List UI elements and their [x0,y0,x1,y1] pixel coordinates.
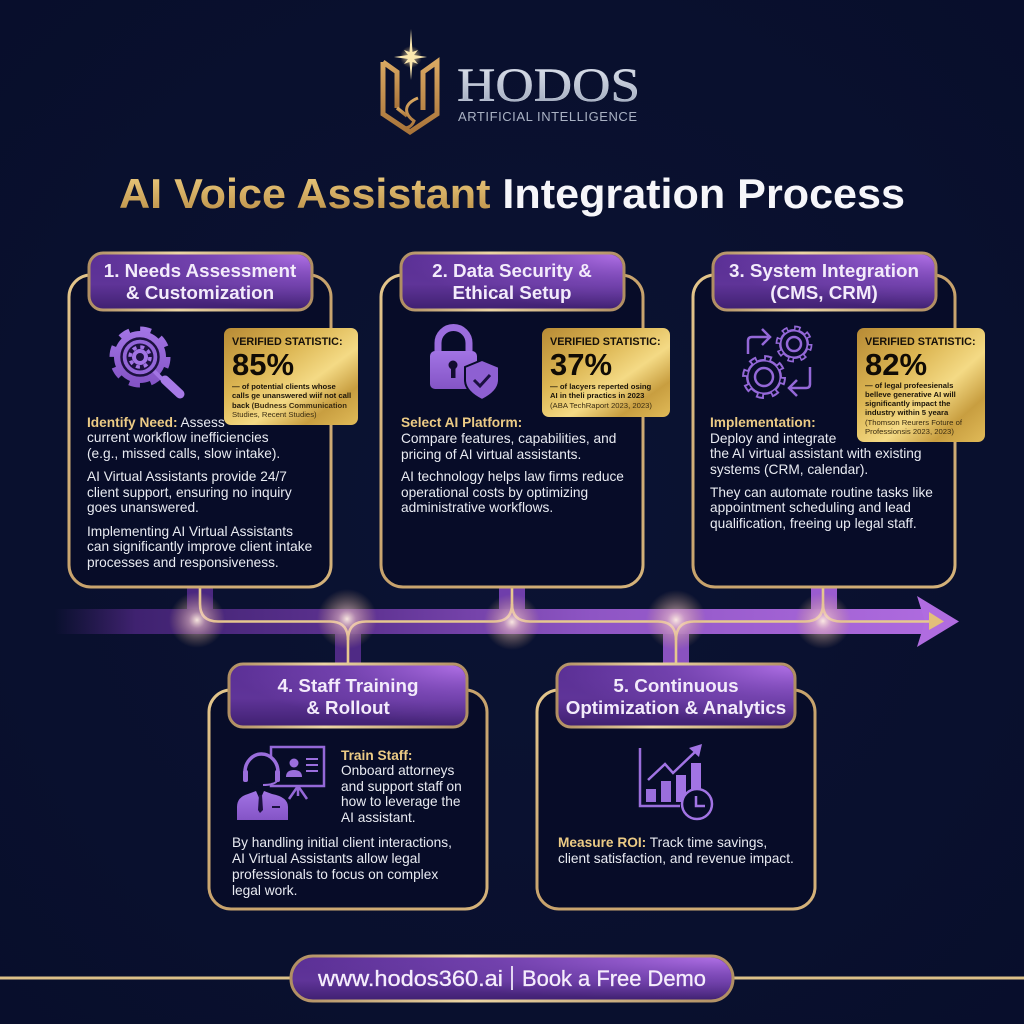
body text: (e.g., missed calls, slow intake). [87,446,280,461]
callout: verified statistic 82%: VERIFIED STATISTIC: [865,336,976,348]
body text: Train Staff: [341,748,412,763]
body text: AI Virtual Assistants provide 24/7 [87,469,287,484]
callout: verified statistic 82%: significantly impact the [865,399,951,408]
header [89,253,312,310]
body text: operational costs by optimizing [401,485,588,500]
body text: current workflow inefficiencies [87,430,269,445]
callout: verified statistic 85%: VERIFIED STATISTIC: [232,336,343,348]
logo wordmark: HODOS [457,59,640,112]
body text [558,835,794,866]
body text: AI technology helps law firms reduce [401,469,624,484]
panel: step 4 staff training [209,664,487,909]
title: AI Voice Assistant Integration Process [119,170,905,217]
body text [87,415,312,570]
callout: verified statistic 85%: calls ge unanswered wiif not call [232,391,351,400]
icon: padlock and shield [430,328,499,400]
body text: professionals to focus on complex [232,867,438,882]
icon: trainer at presentation board [237,747,324,820]
callout: verified statistic 37%: 37% [550,347,612,382]
callout: verified statistic 82%: Professionsis 2023, 2023) [865,427,954,436]
footer shine [292,958,732,1000]
callout: verified statistic 85% [224,328,358,425]
panel frame [381,275,643,587]
body text: Implementing AI Virtual Assistants [87,524,293,539]
panel: step 3 system integration [693,253,985,587]
callout: verified statistic 82%: — of legal profeesienals [865,381,953,390]
body text: Compare features, capabilities, and [401,431,616,446]
logo: Hodos Artificial Intelligence [383,29,640,132]
panel frame [69,275,331,587]
body text: By handling initial client interactions, [232,835,452,850]
body text: Measure ROI: Track time savings, [558,835,767,850]
body text: can significantly improve client intake [87,539,312,554]
panel frame [209,690,487,909]
callout: verified statistic 82%: belleve generative AI will [865,390,956,399]
header: & Customization [126,282,274,303]
flow connector lines [200,587,932,663]
body text: Identify Need: Assess [87,415,225,430]
panel: step 1 needs assessment [69,253,358,587]
callout: verified statistic 82%: industry within 5 yeara [865,408,949,417]
body text: and support staff on [341,779,462,794]
callout: verified statistic 85%: back (Budness Communication [232,401,347,410]
header: Optimization & Analytics [566,697,786,718]
body text: Implementation: [710,415,816,430]
header: 5. Continuous [613,675,739,696]
body text [401,415,624,515]
logo tagline: ARTIFICIAL INTELLIGENCE [458,109,637,124]
icon: shield H emblem [383,62,437,132]
callout: verified statistic 82% [857,328,985,442]
panel frame [537,690,815,909]
panel: step 5 continuous optimization [537,664,815,909]
icon: star [394,29,427,80]
footer call to action [0,956,1024,1001]
body text [232,748,462,898]
body text: administrative workflows. [401,500,553,515]
glow nodes [169,589,851,650]
arrow tip [929,612,944,630]
body text: systems (CRM, calendar). [710,462,868,477]
footer demo text: Book a Free Demo [522,966,706,991]
callout: verified statistic 85%: 85% [232,347,294,382]
body text: AI assistant. [341,810,416,825]
callout: verified statistic 37%: — of lacyers reperted osing [550,382,652,391]
icon: gear with magnifier [113,330,180,394]
header [713,253,936,310]
body text: appointment scheduling and lead [710,500,911,515]
callout: verified statistic 85%: Studies, Recent Studies) [232,410,317,419]
panel: step 2 data security [381,253,670,587]
body text: processes and responsiveness. [87,555,279,570]
body text [710,415,933,531]
header: 2. Data Security & [432,260,592,281]
header: & Rollout [306,697,390,718]
icon: gears and sync arrows [745,328,810,396]
footer divider [511,966,513,990]
body text: qualification, freeing up legal staff. [710,516,917,531]
arrow head [917,596,959,647]
callout: verified statistic 37%: AI in theli practics in 2023 [550,391,644,400]
process flow arrow [55,587,959,663]
callout: verified statistic 85%: — of potential clients whose [232,382,337,391]
icon: growth chart with clock [640,744,712,819]
header: 3. System Integration [729,260,919,281]
header [229,664,467,727]
body text: the AI virtual assistant with existing [710,446,922,461]
callout: verified statistic 37%: VERIFIED STATISTIC: [550,336,661,348]
body text: Select AI Platform: [401,415,522,430]
header [557,664,795,727]
body text: legal work. [232,883,297,898]
header: 1. Needs Assessment [104,260,297,281]
callout: verified statistic 37% [542,328,670,417]
panel frame [693,275,955,587]
header [401,253,624,310]
header: (CMS, CRM) [770,282,878,303]
body text: Onboard attorneys [341,763,455,778]
callout: verified statistic 82%: (Thomson Reurers Foture of [865,418,963,427]
callout: verified statistic 37%: (ABA TechRaport 2023, 2023) [550,401,652,410]
flow band [55,609,925,634]
body text: pricing of AI virtual assistants. [401,447,581,462]
footer rule [0,976,1024,980]
callout: verified statistic 82%: 82% [865,347,927,382]
body text: AI Virtual Assistants allow legal [232,851,420,866]
body text: goes unanswered. [87,500,199,515]
footer pill [291,956,733,1001]
body text: client support, ensuring no inquiry [87,485,292,500]
body text: how to leverage the [341,794,460,809]
body text: client satisfaction, and revenue impact. [558,851,794,866]
header: Ethical Setup [453,282,571,303]
body text: Deploy and integrate [710,431,836,446]
header: 4. Staff Training [278,675,418,696]
footer text: www.hodos360.ai [317,966,503,991]
body text: They can automate routine tasks like [710,485,933,500]
